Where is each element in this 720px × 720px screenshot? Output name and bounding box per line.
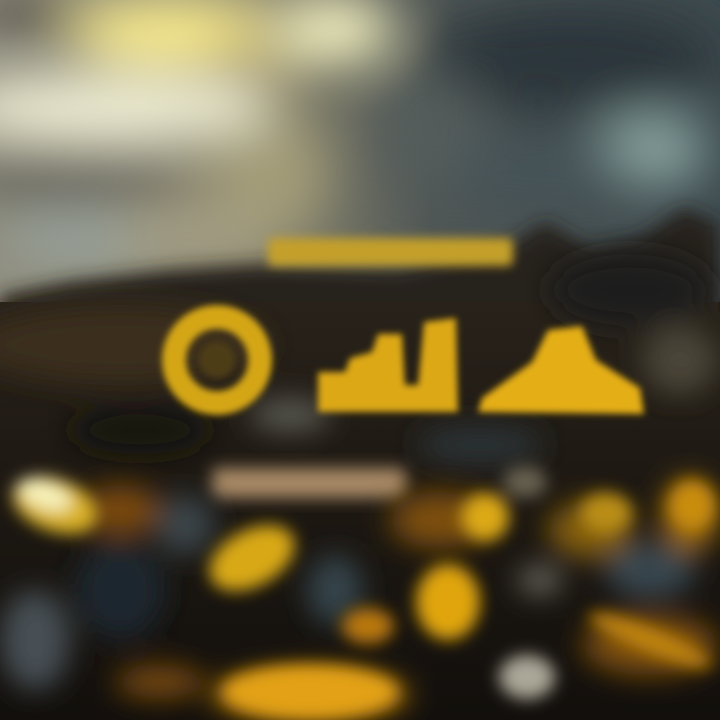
- icon: bar chart: [318, 318, 458, 412]
- icon: mountain: [478, 326, 644, 414]
- rocks and gold nuggets foreground: [0, 466, 718, 719]
- sky background: [0, 0, 720, 340]
- icon: ring: [174, 317, 260, 403]
- caption bar: blurred label: [212, 468, 406, 498]
- heading bar: blurred title: [268, 238, 513, 266]
- dark hills and ground: [0, 208, 720, 720]
